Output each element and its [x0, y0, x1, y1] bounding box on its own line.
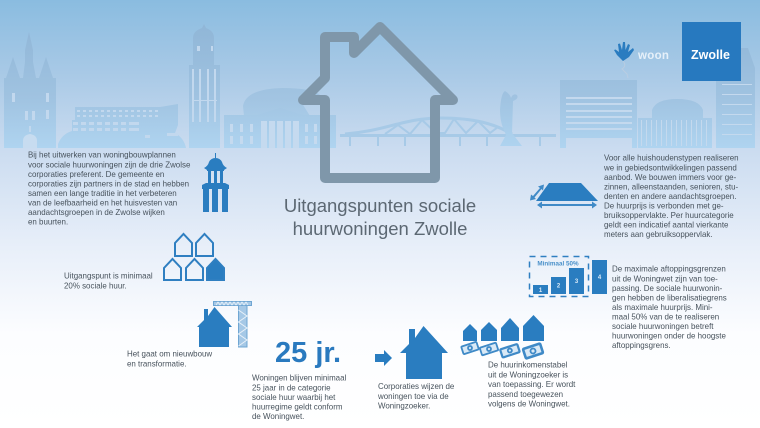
text block: gebruiksoppervlakte: bruiksoppervlakte. Per huurcategorie: [604, 211, 734, 220]
icon: five houses, one filled: [164, 234, 224, 280]
text block: aftoppingsgrenzen: maal 50% van de te realiseren: [612, 312, 719, 321]
text block: 20% sociale huur: Uitgangspunt is minimaal: [64, 272, 153, 281]
text block: aftoppingsgrenzen: De maximale aftoppingsgrenzen: [612, 265, 726, 274]
text block: gebruiksoppervlakte: zinnen, alleenstaanden, senioren, stu-: [604, 182, 739, 191]
text block: aftoppingsgrenzen: uit de Woningwet zijn van toe-: [612, 274, 718, 283]
text block: gebruiksoppervlakte: geldt een indicatief aantal vierkante: [604, 221, 729, 230]
text block: nieuwbouw: en transformatie.: [127, 359, 187, 368]
text block: aftoppingsgrenzen: gen hebben de liberalisatiegrens: [612, 293, 727, 302]
skyline: theatre: [224, 88, 336, 148]
text block: corporaties: voor sociale huurwoningen zijn de drie Zwolse: [28, 160, 191, 169]
text block: nieuwbouw: Het gaat om nieuwbouw: [127, 350, 212, 359]
heading: 25 jr.: 25 jr.: [275, 337, 341, 369]
text block: 25 jaar: de Woningwet.: [252, 412, 304, 421]
text block: gebruiksoppervlakte: we in gebiedsontwikkelingen passend: [603, 163, 737, 172]
text block: aftoppingsgrenzen: aftoppingsgrens.: [612, 341, 671, 350]
text block: huurinkomenstabel: van toepassing. Er wordt: [488, 380, 576, 389]
text block: corporaties: corporaties zijn partners in de stad en hebben: [28, 179, 189, 188]
logo: woon wordmark: woon: [637, 50, 669, 62]
chart: rent-cap bars: [530, 256, 607, 296]
skyline: long building: [58, 104, 186, 148]
logo: blue square: [682, 22, 741, 81]
text block: corporaties: en buurten.: [28, 218, 68, 227]
text block: corporaties: aandachtsgroepen in de Zwolse wijken: [28, 208, 165, 217]
text block: gebruiksoppervlakte: aanbod. We bouwen immers voor ge-: [604, 173, 737, 182]
text block: huurinkomenstabel: uit de Woningzoeker is: [488, 370, 568, 379]
house: [197, 307, 232, 347]
icon: floor area with arrows: [530, 183, 598, 208]
text block: corporaties: van de leefbaarheid en het huisvesten van: [28, 198, 177, 207]
text block: Woningzoeker: Corporaties wijzen de: [378, 382, 455, 391]
text block: corporaties: samen een lange traditie in het verbeteren: [28, 189, 177, 198]
bar 3: 3: [575, 279, 579, 285]
title: huurwoningen Zwolle: [293, 218, 467, 239]
text block: huurinkomenstabel: De huurinkomenstabel: [488, 361, 568, 370]
text block: corporaties: Bij het uitwerken van woningbouwplannen: [28, 151, 176, 160]
title: Uitgangspunten sociale: [284, 195, 476, 216]
icon: banknotes: [461, 342, 543, 359]
text block: 25 jaar: huurregime geldt conform: [252, 402, 343, 412]
text block: aftoppingsgrenzen: als maximale huurprijs. Mini-: [612, 303, 713, 312]
text block: huurinkomenstabel: passend toegewezen: [488, 390, 563, 399]
dashed box: [530, 256, 588, 296]
text block: Woningzoeker: Woningzoeker.: [378, 402, 430, 411]
icon: four houses: [463, 315, 544, 341]
label: Minimaal 50%: Minimaal 50%: [537, 260, 579, 268]
text block: gebruiksoppervlakte: Voor alle huishoudenstypen realiseren: [604, 154, 739, 163]
logo: woonZwolle: [614, 22, 741, 81]
skyline: domed building: [638, 99, 712, 148]
text block: corporaties: corporaties preferent. De gemeente en: [28, 170, 164, 179]
crane: [214, 302, 252, 347]
text block: aftoppingsgrenzen: huurwoningen onder de hoogste: [612, 332, 726, 341]
icon: large house outline: [303, 27, 453, 178]
skyline: office block: [560, 80, 637, 148]
icon: house with crane: [197, 302, 252, 347]
text block: 25 jaar: Woningen blijven minimaal: [252, 374, 347, 383]
icon: town hall tower: [202, 153, 229, 212]
bar 4: 4: [598, 275, 602, 281]
text block: huurinkomenstabel: volgens de Woningwet.: [488, 400, 570, 408]
text block: aftoppingsgrenzen: sociale huurwoningen betreft: [612, 322, 714, 331]
skyline: statue: [500, 91, 522, 146]
logo: Zwolle wordmark: Zwolle: [691, 48, 730, 62]
skyline: bridge: [340, 118, 556, 146]
text block: 25 jaar: 25 jaar in de categorie: [252, 383, 331, 392]
text block: 25 jaar: sociale huur waarbij het: [252, 393, 336, 402]
logo: hand icon: [614, 42, 634, 78]
icon: arrow: [375, 350, 392, 366]
skyline: [4, 24, 755, 148]
skyline: church tower: [189, 24, 220, 148]
skyline: high-rise: [716, 48, 755, 148]
icon: blue house: [400, 326, 448, 379]
text block: gebruiksoppervlakte: denten en andere aandachtsgroepen.: [604, 192, 736, 201]
bar 1: 1: [539, 288, 543, 294]
text block: gebruiksoppervlakte: De huurprijs is verbonden met ge-: [604, 201, 724, 210]
text block: 20% sociale huur: 20% sociale huur.: [64, 281, 127, 290]
text block: aftoppingsgrenzen: passing. De sociale huurwonin-: [612, 284, 723, 293]
text block: gebruiksoppervlakte: meters aan gebruiksoppervlak.: [604, 230, 713, 239]
bar 2: 2: [557, 284, 561, 290]
skyline: city gate: [4, 32, 56, 148]
text block: Woningzoeker: woningen toe via de: [377, 392, 449, 401]
